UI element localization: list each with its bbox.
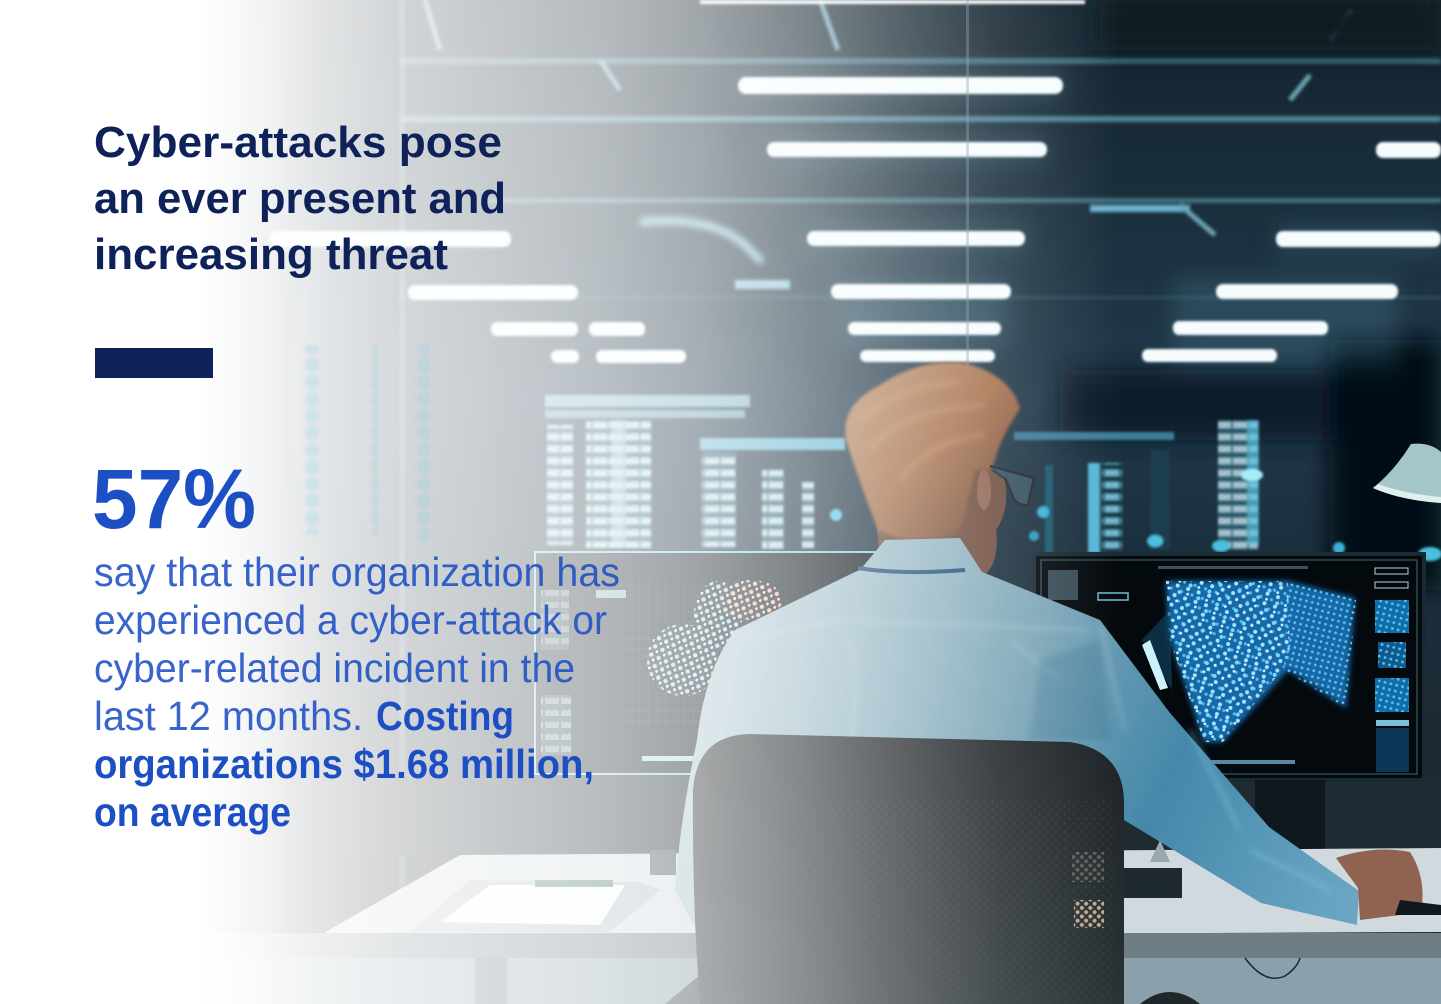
white fade overlay (200, 0, 1120, 1004)
server racks (545, 395, 1441, 561)
statistic description: cyber-related incident in the (94, 645, 575, 691)
hand (1336, 850, 1422, 920)
glass reflection line (966, 0, 969, 370)
glasses (990, 466, 1034, 505)
shirt (675, 538, 1359, 1004)
shirt folds (720, 620, 1125, 740)
neck and ear (874, 450, 1006, 575)
dark background masses (1060, 0, 1441, 590)
faded rack lights at left (304, 345, 430, 545)
lanyard (858, 568, 965, 572)
office chair (693, 734, 1124, 1004)
ceiling structure (400, 0, 1441, 1004)
statistic description: organizations $1.68 million, (94, 741, 594, 787)
title: increasing threat (94, 230, 448, 279)
statistic description: Costing (376, 693, 514, 739)
statistic description: experienced a cyber-attack or (94, 597, 607, 643)
left monitor (535, 552, 880, 774)
title (94, 118, 506, 279)
statistic description: say that their organization has (94, 549, 620, 595)
statistic description: last 12 months. (94, 693, 363, 739)
lamp (1373, 444, 1441, 503)
desk (0, 780, 1441, 1004)
hair (845, 362, 1020, 539)
ceiling lights (270, 0, 1441, 363)
ceiling light glow (738, 70, 1441, 367)
title: an ever present and (94, 174, 506, 223)
statistic: 57%: 57% (92, 452, 256, 546)
accent bar (95, 348, 213, 378)
statistic description: on average (94, 789, 291, 835)
area below monitors (300, 775, 1441, 855)
title: Cyber-attacks pose (94, 118, 502, 167)
statistic description (94, 549, 620, 835)
right monitor (1034, 554, 1424, 780)
man (675, 362, 1441, 1004)
